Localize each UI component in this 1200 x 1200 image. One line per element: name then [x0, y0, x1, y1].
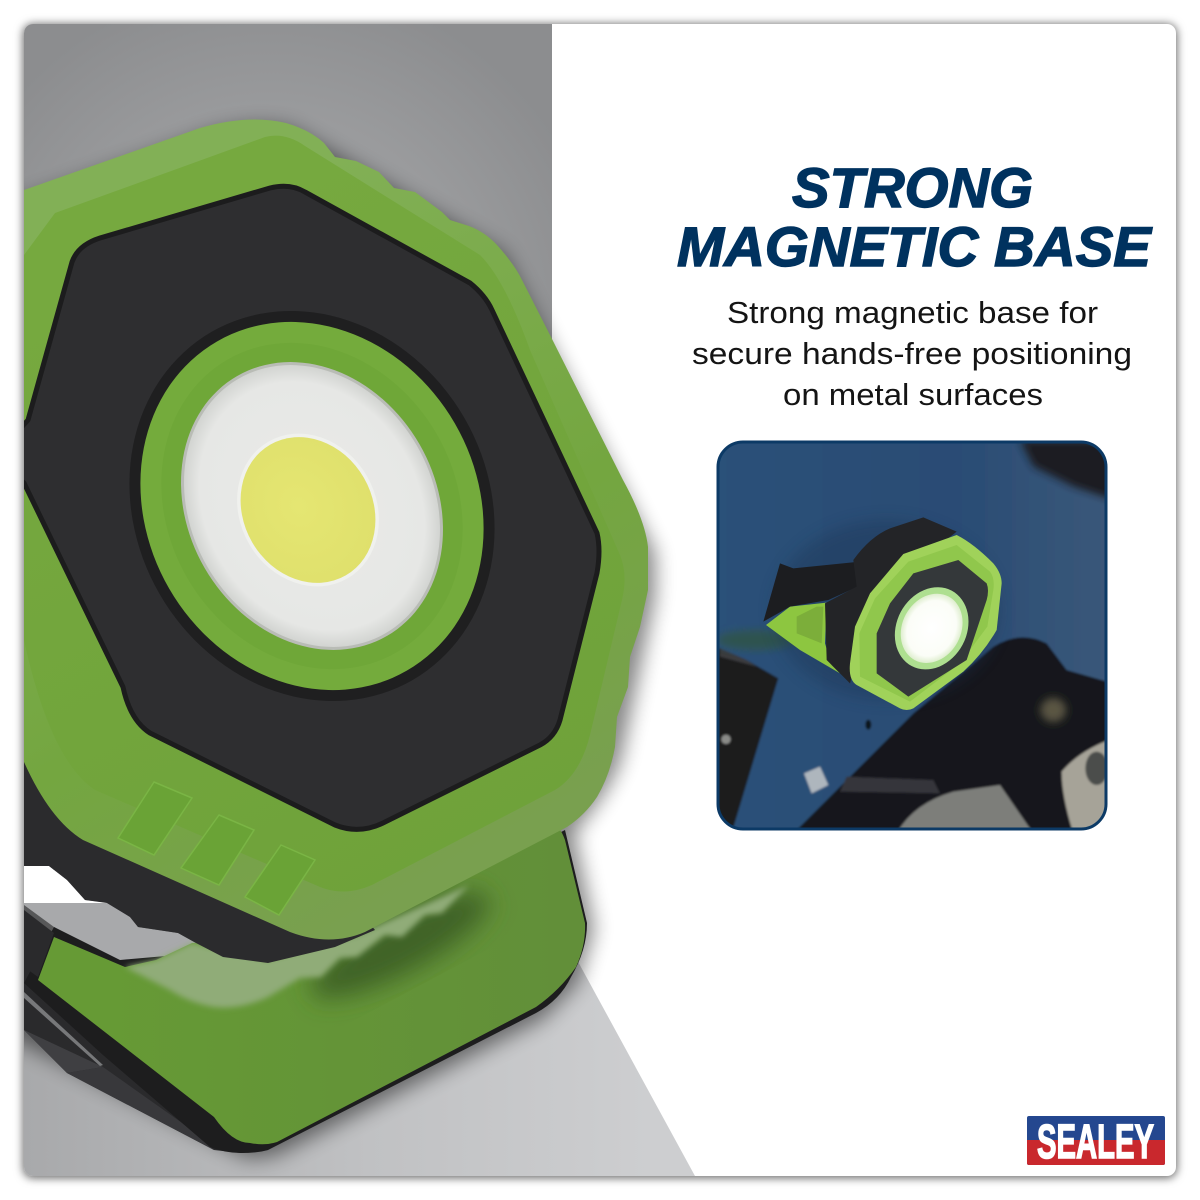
grey pulley	[897, 785, 1033, 833]
metal roller	[1062, 738, 1113, 833]
olive reflection	[717, 630, 797, 650]
photo scene	[713, 440, 1113, 833]
black clip arm	[763, 562, 865, 622]
dark rear housing with teeth	[24, 750, 375, 963]
lit ring	[881, 574, 983, 682]
green outer housing	[0, 119, 648, 939]
green inner bevel	[0, 136, 625, 892]
dark face	[877, 560, 988, 697]
heading line 2: MAGNETIC BASE	[677, 215, 1153, 278]
heading	[677, 156, 1153, 278]
lens glass	[184, 365, 440, 647]
frame inner bevel	[859, 545, 994, 702]
dark bracket left	[720, 648, 779, 826]
grip ridge 2	[181, 815, 254, 885]
dark engine bay	[793, 637, 1113, 833]
lower dark wedge of stand	[24, 950, 268, 1153]
bracket top bevel	[720, 648, 757, 667]
lens ring inner band	[103, 288, 521, 724]
mini work light	[763, 517, 1002, 710]
sticker	[804, 767, 828, 793]
logo red band	[1027, 1140, 1165, 1165]
photo frame border	[718, 442, 1106, 829]
grey gap between housing and base	[24, 903, 196, 960]
grey floor wedge	[24, 903, 695, 1176]
green base plate	[38, 830, 585, 1144]
grey backdrop	[24, 24, 552, 870]
hole in blue plate	[865, 720, 871, 730]
body text	[692, 295, 1132, 412]
reflection on base plate	[125, 885, 469, 1008]
product shadow	[7, 125, 655, 1159]
roller bearing	[1085, 752, 1108, 785]
black faceplate	[10, 186, 599, 829]
dark left hinge piece	[24, 910, 54, 977]
glowing lens	[889, 583, 974, 674]
black base rim	[24, 830, 587, 1153]
green clip foot	[766, 603, 840, 673]
panel: left product photo	[0, 24, 695, 1176]
clip foot shade	[797, 607, 823, 643]
green lens ring	[140, 322, 484, 690]
body line 1: Strong magnetic base for	[727, 295, 1098, 330]
heading line 1: STRONG	[792, 156, 1033, 219]
grip ridge 1	[118, 782, 192, 855]
bolt head left	[721, 735, 731, 744]
COB halo	[238, 434, 378, 586]
stand highlight line	[24, 992, 103, 1066]
white gap behind housing	[24, 866, 110, 903]
light shadow	[773, 520, 1000, 700]
panel: in-use photo	[713, 440, 1113, 833]
nut glow	[1041, 698, 1066, 722]
COB LED chip	[240, 437, 376, 583]
stand facet	[24, 1030, 103, 1073]
blue metal background	[713, 440, 1113, 833]
black rear housing	[825, 517, 957, 683]
grip ridge 3	[245, 845, 315, 915]
photo content	[713, 440, 1113, 833]
pipe in engine bay	[840, 777, 940, 793]
shadow on base plate	[304, 883, 496, 1008]
body line 2: secure hands-free positioning	[692, 336, 1132, 371]
ring groove	[130, 311, 494, 701]
logo blue band	[1027, 1116, 1165, 1165]
logo: SEALEY	[1027, 1116, 1165, 1169]
body line 3: on metal surfaces	[783, 377, 1043, 412]
stand lower facet	[67, 1067, 214, 1150]
dark top-right background	[1020, 440, 1113, 500]
lens glass edge	[181, 362, 443, 650]
green outer frame	[850, 535, 1002, 710]
icon: work light product	[0, 119, 648, 1153]
